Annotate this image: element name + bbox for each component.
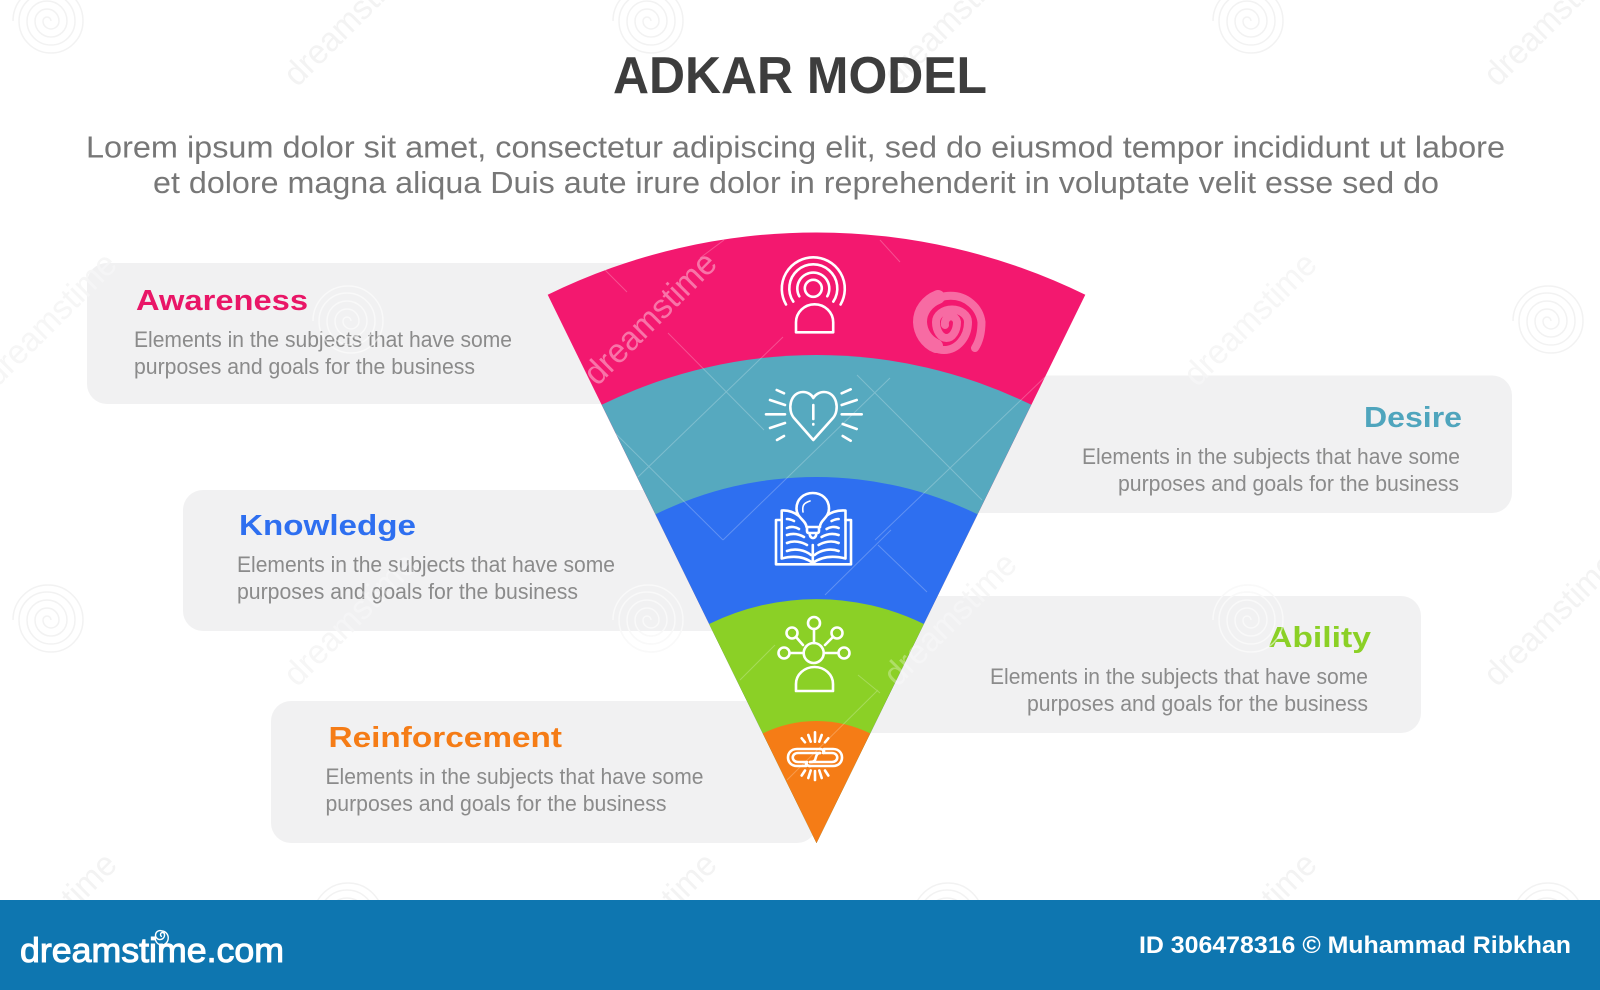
heading: Awareness: Awareness — [136, 285, 308, 317]
segment: Desire — [602, 355, 1031, 843]
watermark over panels and funnel: dreamstime — [576, 244, 725, 393]
icon: desire heart with alert — [766, 389, 862, 441]
text: Desire description: Elements in the subjects that have some — [1082, 444, 1460, 469]
footer logo: dreamstime.com — [20, 932, 284, 970]
segment: Reinforcement — [763, 721, 870, 843]
watermark over panels and funnel: dreamstime — [276, 545, 425, 694]
watermark over panels and funnel: dreamstime — [1176, 245, 1325, 394]
title: ADKAR MODEL — [613, 47, 987, 105]
text: Reinforcement description: Elements in the subjects that have some — [326, 764, 704, 789]
watermark pattern on background: dreamstime — [576, 845, 725, 990]
heading: Ability: Ability — [1268, 622, 1371, 654]
panel: Ability — [800, 596, 1421, 733]
watermark pattern on background: dreamstime — [1176, 845, 1325, 990]
panel: Awareness — [87, 263, 707, 404]
icon: logo spiral — [155, 931, 168, 945]
icon: awareness broadcast person — [782, 257, 845, 332]
text: Awareness description — [134, 327, 512, 379]
subtitle: Lorem ipsum dolor sit amet, consectetur adipiscing elit, sed do eiusmod tempor incididunt ut labore — [86, 130, 1505, 164]
icon: reinforcement chain link — [788, 732, 842, 780]
heading: Knowledge: Knowledge — [239, 510, 416, 542]
text: Knowledge description: purposes and goals for the business — [237, 579, 578, 604]
watermark pattern on background: dreamstime — [1176, 245, 1325, 394]
text: Reinforcement description: purposes and goals for the business — [326, 791, 666, 816]
segment: Awareness — [548, 232, 1085, 843]
panel: Reinforcement — [271, 701, 817, 843]
heading: Reinforcement: Reinforcement — [328, 722, 562, 754]
footer bar — [0, 900, 1600, 990]
panel: Knowledge — [183, 490, 783, 631]
panel: Desire — [900, 376, 1512, 513]
text: Ability description — [990, 664, 1368, 716]
text: Knowledge description: Elements in the subjects that have some — [237, 552, 615, 577]
watermark over panels and funnel: dreamstime — [876, 545, 1025, 694]
text: Desire description — [1082, 444, 1460, 496]
footer credit: ID 306478316 © Muhammad Ribkhan — [1139, 932, 1571, 959]
text: Desire description: purposes and goals for the business — [1118, 471, 1459, 496]
text: Ability description: Elements in the subjects that have some — [990, 664, 1368, 689]
text: Reinforcement description — [326, 764, 704, 816]
funnel chart — [320, 232, 1283, 843]
text: Ability description: purposes and goals for the business — [1027, 691, 1368, 716]
segment: Knowledge — [656, 477, 978, 843]
heading: Desire: Desire — [1364, 402, 1462, 434]
icon: knowledge book with bulb — [776, 493, 851, 564]
watermark pattern on background: dreamstime — [876, 545, 1025, 694]
subtitle: et dolore magna aliqua Duis aute irure dolor in reprehenderit in voluptate velit esse sed do — [153, 165, 1439, 200]
watermark pattern on background: dreamstime — [276, 545, 425, 694]
text: Knowledge description — [237, 552, 615, 604]
text: Awareness description: Elements in the subjects that have some — [134, 327, 512, 352]
subtitle — [86, 130, 1505, 200]
segment: Ability — [709, 599, 924, 843]
watermark over panels and funnel — [320, 240, 1283, 780]
text: Awareness description: purposes and goals for the business — [134, 354, 475, 379]
icon: ability network person — [778, 617, 850, 691]
